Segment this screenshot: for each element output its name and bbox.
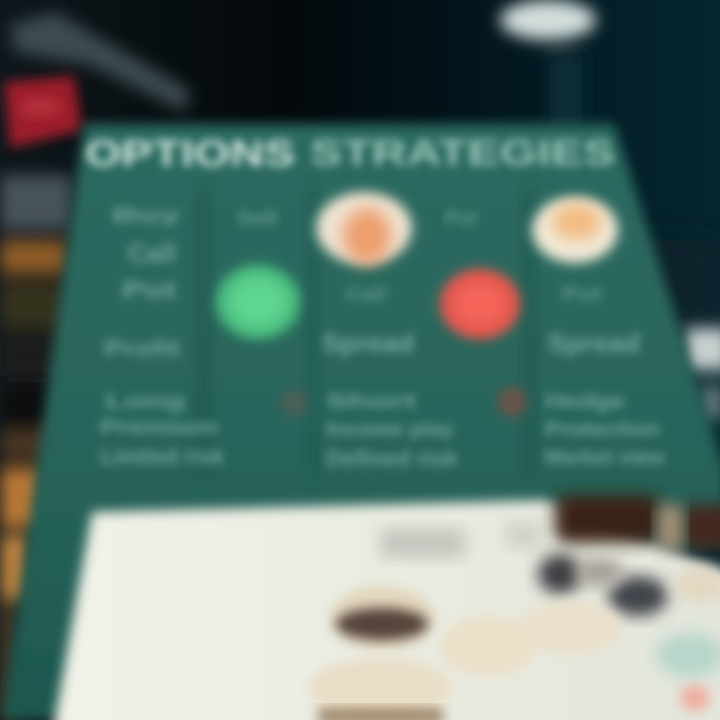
small red dot right xyxy=(497,387,527,417)
column 4 label: Put xyxy=(445,208,477,228)
column 1 labels: Call xyxy=(128,238,176,268)
cookies and snacks cluster xyxy=(308,495,720,720)
lower text block right: Protection xyxy=(545,419,660,441)
column 3 labels: Spread xyxy=(322,328,414,358)
column 3 labels: Call xyxy=(346,284,386,304)
lower text block centre xyxy=(326,391,459,471)
board heading: STRATEGIES xyxy=(310,132,615,173)
column 1 labels: Put xyxy=(122,277,176,304)
lower text block centre: Short xyxy=(326,391,417,413)
column 1 labels: Buy xyxy=(112,205,182,227)
white paper sheet xyxy=(52,500,720,720)
background: left shelves xyxy=(0,175,72,720)
lower text block centre: Defined risk xyxy=(326,446,459,471)
lower text block left xyxy=(100,391,225,469)
green indicator circle xyxy=(216,265,300,339)
orange coin top right xyxy=(532,197,618,263)
lower text block left: Premium xyxy=(100,417,218,439)
lower text block centre: Income play xyxy=(326,419,455,441)
small dark dot left xyxy=(280,389,308,417)
lower text block left: Limited risk xyxy=(100,444,225,469)
orange coin top centre xyxy=(316,192,412,264)
lower text block right: Market view xyxy=(545,447,665,469)
background: red sign xyxy=(4,76,82,148)
lower text block right xyxy=(545,391,665,469)
column 3 labels xyxy=(322,284,414,358)
column 5 labels: Put xyxy=(562,284,602,304)
column 2 label: Sell xyxy=(237,208,277,228)
column 5 labels xyxy=(548,284,640,358)
board heading xyxy=(85,132,615,174)
column 1 labels xyxy=(104,205,182,361)
lower text block left: Long xyxy=(105,391,185,413)
background: right edge highlight xyxy=(685,328,720,420)
lower text block right: Hedge xyxy=(545,391,625,413)
column 5 labels: Spread xyxy=(548,328,640,358)
red indicator circle xyxy=(440,269,520,339)
column 1 labels: Profit xyxy=(104,336,181,361)
board heading: OPTIONS xyxy=(85,133,295,174)
background: ceiling lights xyxy=(10,0,596,125)
